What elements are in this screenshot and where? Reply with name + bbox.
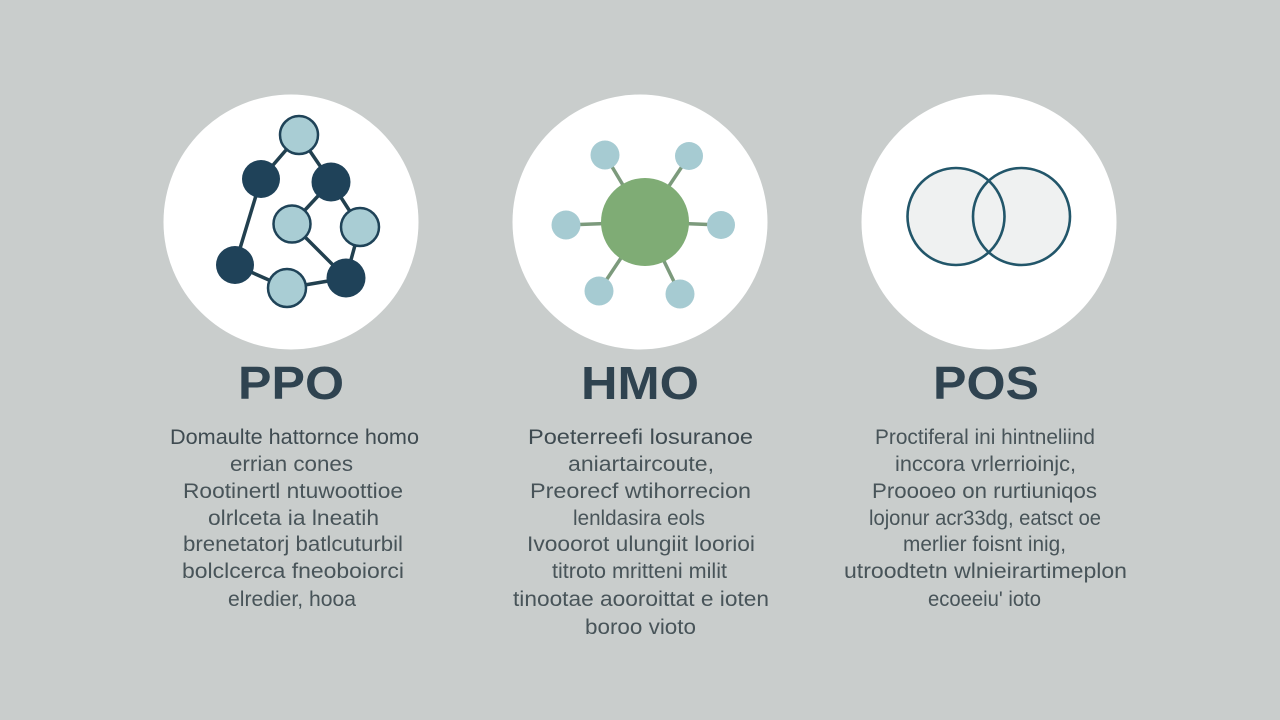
text block: POS description: ecoeeiu' ioto bbox=[928, 588, 1041, 611]
text block: PPO description: olrlceta ia lneatih bbox=[208, 507, 379, 530]
panel: HMO bbox=[512, 94, 769, 639]
text block: POS description bbox=[844, 426, 1127, 611]
text block: POS description: inccora vrlerrioinjc, bbox=[895, 453, 1076, 476]
heading: POS: POS bbox=[933, 357, 1039, 409]
text block: PPO description: Domaulte hattornce homo bbox=[170, 426, 419, 449]
text block: PPO description: bolclcerca fneoboiorci bbox=[182, 560, 404, 583]
text block: POS description: Proooeo on rurtiuniqos bbox=[872, 480, 1097, 503]
text block: HMO description: tinootae aooroittat e ioten bbox=[513, 588, 769, 611]
text block: PPO description: Rootinertl ntuwoottioe bbox=[183, 480, 403, 503]
text block: POS description: Proctiferal ini hintneliind bbox=[875, 426, 1095, 449]
text block: PPO description bbox=[170, 426, 419, 611]
text block: HMO description: lenldasira eols bbox=[573, 507, 705, 530]
text block: PPO description: errian cones bbox=[230, 453, 353, 476]
text block: PPO description: elredier, hooa bbox=[228, 588, 356, 611]
icon: HMO hub and spokes bbox=[512, 94, 768, 350]
text block: HMO description: titroto mritteni milit bbox=[552, 560, 727, 583]
text block: HMO description: aniartaircoute, bbox=[568, 453, 714, 476]
heading: HMO: HMO bbox=[581, 357, 699, 409]
panel: POS bbox=[844, 94, 1127, 611]
icon: PPO network bbox=[164, 94, 418, 350]
text block: HMO description: Preorecf wtihorrecion bbox=[530, 480, 751, 503]
text block: POS description: lojonur acr33dg, eatsct oe bbox=[869, 507, 1101, 530]
heading: PPO: PPO bbox=[238, 357, 344, 409]
text block: POS description: merlier foisnt inig, bbox=[903, 533, 1066, 556]
text block: PPO description: brenetatorj batlcuturbil bbox=[183, 533, 403, 556]
panel: PPO bbox=[164, 94, 419, 611]
text block: POS description: utroodtetn wlnieirartimeplon bbox=[844, 560, 1127, 583]
text block: HMO description: Poeterreefi losuranoe bbox=[528, 426, 753, 449]
text block: HMO description: Ivooorot ulungiit loorioi bbox=[527, 533, 755, 556]
text block: HMO description: boroo vioto bbox=[585, 616, 696, 639]
icon: POS overlapping circles bbox=[862, 94, 1116, 350]
text block: HMO description bbox=[513, 426, 769, 639]
